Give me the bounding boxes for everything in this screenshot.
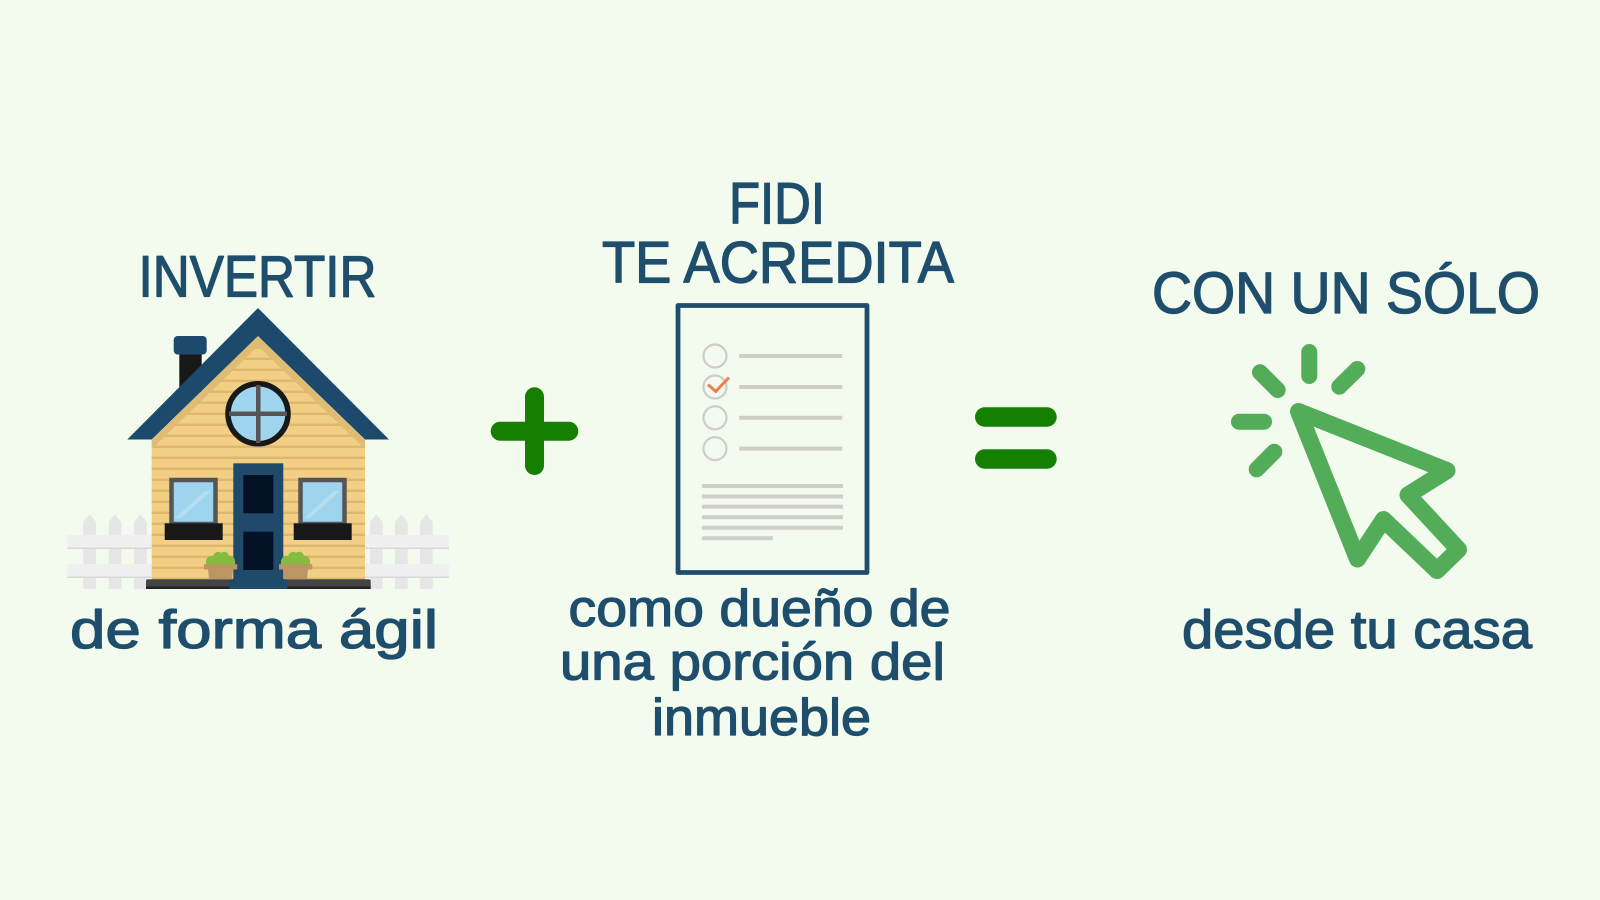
heading: FIDI TE ACREDITA: TE ACREDITA [602,230,954,296]
caption: desde tu casa: desde tu casa [1182,600,1533,660]
click rays [1239,352,1357,469]
icon: cursor click [1239,352,1458,570]
heading: FIDI TE ACREDITA [602,172,954,296]
red check mark [708,378,729,391]
right window [294,480,352,540]
infographic canvas [67,182,1538,736]
icon: equals sign [975,407,1057,469]
paragraph lines [702,484,843,540]
foundation [146,579,371,589]
wall [151,336,366,580]
roof [127,308,389,440]
caption: como dueno de una porcion del inmueble: inmueble [652,689,871,747]
plant right [279,552,312,579]
heading: FIDI TE ACREDITA: FIDI [729,172,825,236]
document frame [678,306,867,572]
caption: como dueno de una porcion del inmueble [560,580,950,747]
cursor arrow [1298,412,1458,570]
plant left [204,552,237,579]
caption: de forma agil: de forma ágil [70,600,438,660]
heading: CON UN SOLO: CON UN SÓLO [1152,261,1540,326]
panel: fidi te acredita [560,172,954,747]
fence left [67,514,152,589]
chimney [174,336,207,392]
fence right [365,514,449,589]
icon: plus sign [500,397,569,466]
caption: como dueno de una porcion del inmueble: como dueño de [568,580,950,638]
panel: con un solo [1152,261,1540,660]
round window [228,384,288,444]
heading: INVERTIR: INVERTIR [138,244,376,310]
icon: house with fence [67,308,449,589]
panel: invertir [67,244,449,660]
checklist rows [704,344,842,460]
icon: checklist document [678,306,867,572]
caption: como dueno de una porcion del inmueble: una porción del [560,634,945,692]
left window [165,480,223,540]
door [229,463,287,589]
